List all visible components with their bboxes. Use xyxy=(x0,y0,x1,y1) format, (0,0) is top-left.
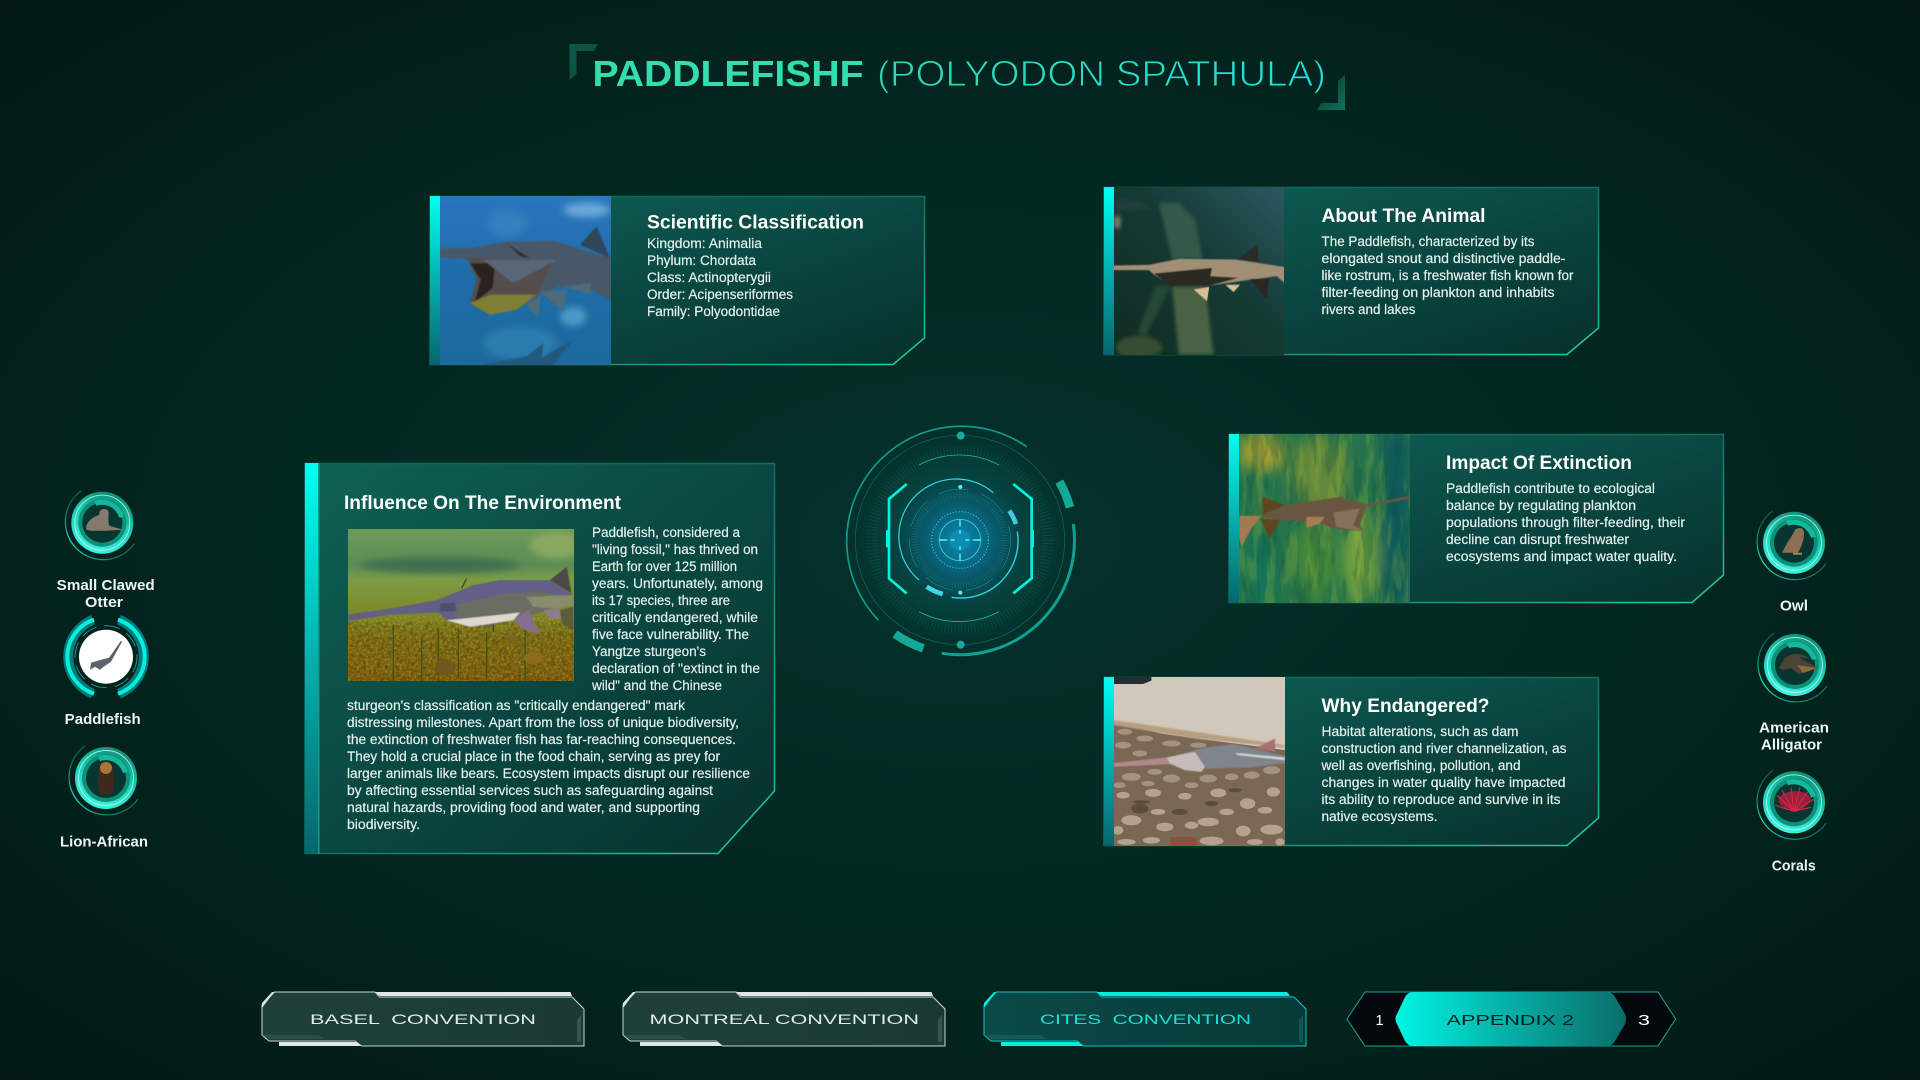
text: impact: ecosystems and impact water quality. xyxy=(1446,549,1677,564)
text: reasons: its ability to reproduce and survive in its xyxy=(1322,792,1561,807)
button label: BASEL CONVENTION xyxy=(310,1011,536,1027)
heading: Impact Of Extinction xyxy=(1446,453,1632,474)
label: American xyxy=(1759,719,1829,736)
title corner bracket: top left xyxy=(570,44,598,80)
title bold part: PADDLEFISHF xyxy=(592,53,864,94)
label xyxy=(57,577,155,611)
option 3: 3 xyxy=(1638,1013,1650,1029)
text: body below photo: biodiversity. xyxy=(347,817,420,832)
text: classification list: Family: Polyodontidae xyxy=(647,304,780,319)
label: Alligator xyxy=(1761,736,1822,753)
species: Owl xyxy=(1757,511,1826,615)
label: Owl xyxy=(1780,598,1808,615)
text: wrapped body, beside photo xyxy=(591,525,763,693)
icon: owl xyxy=(1757,511,1826,580)
text: reasons: changes in water quality have impacted xyxy=(1322,775,1566,790)
text: wrapped body, beside photo: wild" and the Chinese xyxy=(591,678,722,693)
text: impact: Paddlefish contribute to ecological xyxy=(1446,481,1655,496)
text: body below photo: natural hazards, providing food and water, and supporting xyxy=(347,800,700,815)
option 1: 1 xyxy=(1376,1013,1384,1029)
heading: About The Animal xyxy=(1322,206,1486,227)
text: body below photo xyxy=(347,698,750,832)
icon: lion xyxy=(69,746,138,815)
label: Corals xyxy=(1772,858,1816,875)
heading: Why Endangered? xyxy=(1322,696,1490,717)
text: classification list: Kingdom: Animalia xyxy=(647,236,763,251)
text: body below photo: larger animals like bears. Ecosystem impacts disrupt our resilience xyxy=(347,766,750,781)
text: description xyxy=(1322,234,1574,317)
text: wrapped body, beside photo: Earth for over 125 million xyxy=(592,559,737,574)
photo: paddlefish on pebble shore xyxy=(1114,677,1285,846)
panel: why endangered xyxy=(1104,677,1598,846)
text: description: rivers and lakes xyxy=(1322,302,1416,317)
panel: about the animal xyxy=(1104,187,1598,359)
species: Corals xyxy=(1757,770,1826,875)
species: Paddlefish (selected) xyxy=(65,620,145,728)
text: body below photo: They hold a crucial place in the food chain, serving as prey for xyxy=(347,749,721,764)
text: impact xyxy=(1446,481,1686,564)
text: classification list: Class: Actinopterygii xyxy=(647,270,771,285)
text: impact: populations through filter-feeding, their xyxy=(1446,515,1686,530)
text: wrapped body, beside photo: years. Unfortunately, among xyxy=(592,576,763,591)
text: reasons: construction and river channelization, as xyxy=(1322,741,1567,756)
species: American Alligator xyxy=(1758,633,1829,753)
panel: influence on the environment xyxy=(305,463,774,854)
label: Lion-African xyxy=(60,834,148,851)
pill label: APPENDIX 2 xyxy=(1447,1013,1574,1029)
text: reasons: well as overfishing, pollution, and xyxy=(1320,758,1520,773)
title latin name: (POLYODON SPATHULA) xyxy=(877,53,1326,94)
text: classification list: Phylum: Chordata xyxy=(647,253,756,268)
text: reasons xyxy=(1320,724,1567,824)
text: classification list: Order: Acipenseriformes xyxy=(647,287,793,302)
text: body below photo: distressing milestones. Apart from the loss of unique biodiversity, xyxy=(347,715,739,730)
button: Basel Convention xyxy=(262,992,584,1046)
text: classification list xyxy=(647,236,793,319)
icon: alligator xyxy=(1758,633,1827,702)
label xyxy=(1759,719,1829,753)
text: wrapped body, beside photo: declaration of "extinct in the xyxy=(592,661,760,676)
species: Small Clawed Otter xyxy=(57,491,155,611)
button label: MONTREAL CONVENTION xyxy=(650,1011,919,1027)
label: Paddlefish xyxy=(65,711,141,728)
text: body below photo: by affecting essential services such as safeguarding against xyxy=(347,783,713,798)
heading: Scientific Classification xyxy=(647,212,864,234)
button: Montreal Convention xyxy=(623,992,945,1046)
text: wrapped body, beside photo: five face vulnerability. The xyxy=(592,627,749,642)
active appendix pill xyxy=(1396,992,1626,1046)
species: Lion-African xyxy=(60,746,148,851)
appendix selector xyxy=(1347,992,1676,1046)
title xyxy=(570,44,1345,110)
text: body below photo: sturgeon's classification as "critically endangered" mark xyxy=(347,698,685,713)
text: body below photo: the extinction of freshwater fish has far-reaching consequences. xyxy=(347,732,736,747)
text: description: The Paddlefish, characterized by its xyxy=(1322,234,1535,249)
text: description: like rostrum, is a freshwater fish known for xyxy=(1322,268,1574,283)
panel: impact of extinction xyxy=(1229,432,1724,605)
label: Otter xyxy=(85,594,123,611)
text: wrapped body, beside photo: critically endangered, while xyxy=(592,610,758,625)
photo: paddlefish in shallow river xyxy=(348,529,574,681)
panel: scientific classification xyxy=(430,196,924,365)
central HUD target graphic xyxy=(833,413,1087,667)
text: impact: balance by regulating plankton xyxy=(1446,498,1636,513)
text: wrapped body, beside photo: Paddlefish, considered a xyxy=(592,525,740,540)
icon: otter xyxy=(65,491,134,560)
heading: Influence On The Environment xyxy=(344,493,622,514)
photo: paddlefish over submerged logs xyxy=(1114,187,1284,355)
button: CITES Convention (active) xyxy=(984,992,1306,1046)
label: Small Clawed xyxy=(57,577,155,594)
icon: coral xyxy=(1757,770,1826,839)
text: wrapped body, beside photo: "living fossil," has thrived on xyxy=(592,542,758,557)
button label: CITES CONVENTION xyxy=(1040,1011,1251,1027)
text: description: elongated snout and distinctive paddle- xyxy=(1322,251,1566,266)
text: description: filter-feeding on plankton and inhabits xyxy=(1322,285,1555,300)
photo: paddlefish over green algae xyxy=(1239,434,1410,603)
text: impact: decline can disrupt freshwater xyxy=(1446,532,1630,547)
title corner bracket: bottom right xyxy=(1317,75,1345,110)
icon: paddlefish xyxy=(67,620,145,694)
text: reasons: Habitat alterations, such as dam xyxy=(1322,724,1518,739)
photo: paddlefish with open mouth xyxy=(440,196,611,365)
text: wrapped body, beside photo: its 17 species, three are xyxy=(592,593,730,608)
text: wrapped body, beside photo: Yangtze sturgeon's xyxy=(592,644,706,659)
text: reasons: native ecosystems. xyxy=(1322,809,1438,824)
